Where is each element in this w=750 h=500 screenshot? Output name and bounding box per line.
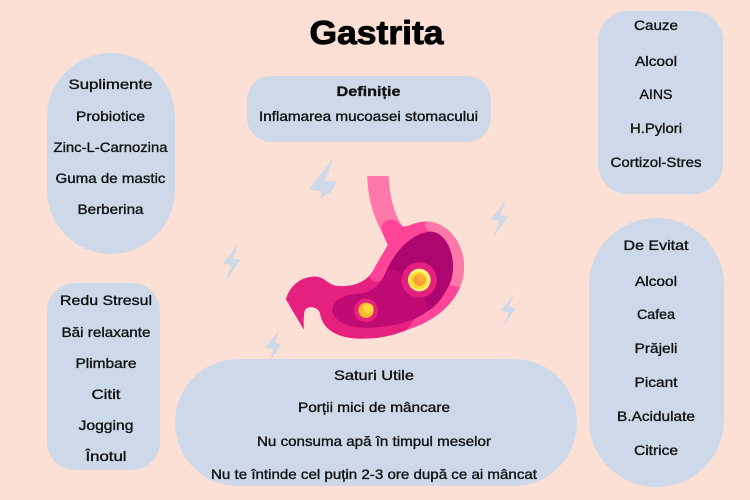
heading: definitie: Definiție bbox=[336, 83, 401, 99]
list: de evitat: Cafea bbox=[637, 306, 675, 322]
list: cauze bbox=[610, 53, 702, 170]
panel: suplimente bbox=[47, 53, 175, 254]
list: redu stresul: Citit bbox=[92, 386, 121, 402]
list: suplimente bbox=[54, 108, 168, 217]
panel: cauze bbox=[598, 11, 723, 194]
list: suplimente: Zinc-L-Carnozina bbox=[54, 139, 168, 155]
list: redu stresul: Jogging bbox=[78, 417, 134, 433]
list: redu stresul: Băi relaxante bbox=[62, 324, 151, 340]
list: saturi utile: Porții mici de mâncare bbox=[298, 399, 450, 415]
heading: suplimente: Suplimente bbox=[68, 76, 153, 92]
panel: redu stresul bbox=[47, 283, 160, 470]
list: suplimente: Probiotice bbox=[76, 108, 145, 124]
list: redu stresul: Plimbare bbox=[76, 355, 137, 371]
list: de evitat: Prăjeli bbox=[634, 340, 678, 356]
list: saturi utile: Nu consuma apă în timpul meselor bbox=[257, 433, 491, 449]
text: definitie: Inflamarea mucoasei stomacului bbox=[259, 108, 478, 124]
heading: cauze: Cauze bbox=[634, 17, 678, 33]
list: cauze: Alcool bbox=[635, 53, 677, 69]
title: Gastrita bbox=[310, 14, 444, 51]
panel: de evitat bbox=[589, 218, 724, 487]
list: redu stresul bbox=[62, 324, 151, 464]
list: redu stresul: Înotul bbox=[84, 448, 126, 464]
list: cauze: Cortizol-Stres bbox=[610, 154, 702, 170]
icon: lightning bolts bbox=[223, 157, 516, 362]
illustration: stomach with lightning bolts bbox=[223, 157, 516, 362]
list: de evitat bbox=[617, 273, 695, 458]
list: de evitat: Citrice bbox=[634, 442, 678, 458]
list: cauze: H.Pylori bbox=[630, 120, 682, 136]
list: cauze: AINS bbox=[640, 86, 672, 102]
list: de evitat: B.Acidulate bbox=[617, 408, 695, 424]
icon: stomach bbox=[286, 176, 464, 339]
list: de evitat: Alcool bbox=[635, 273, 677, 289]
list: suplimente: Guma de mastic bbox=[56, 170, 166, 186]
list: suplimente: Berberina bbox=[78, 201, 144, 217]
heading: saturi utile: Saturi Utile bbox=[334, 367, 414, 383]
list: de evitat: Picant bbox=[634, 374, 678, 390]
panel: saturi utile bbox=[175, 359, 577, 486]
heading: redu stresul: Redu Stresul bbox=[60, 292, 152, 308]
list: saturi utile bbox=[211, 399, 537, 482]
panel: definitie bbox=[247, 76, 491, 142]
heading: de evitat: De Evitat bbox=[624, 237, 689, 253]
list: saturi utile: Nu te întinde cel puțin 2-3 ore după ce ai mâncat bbox=[211, 466, 537, 482]
